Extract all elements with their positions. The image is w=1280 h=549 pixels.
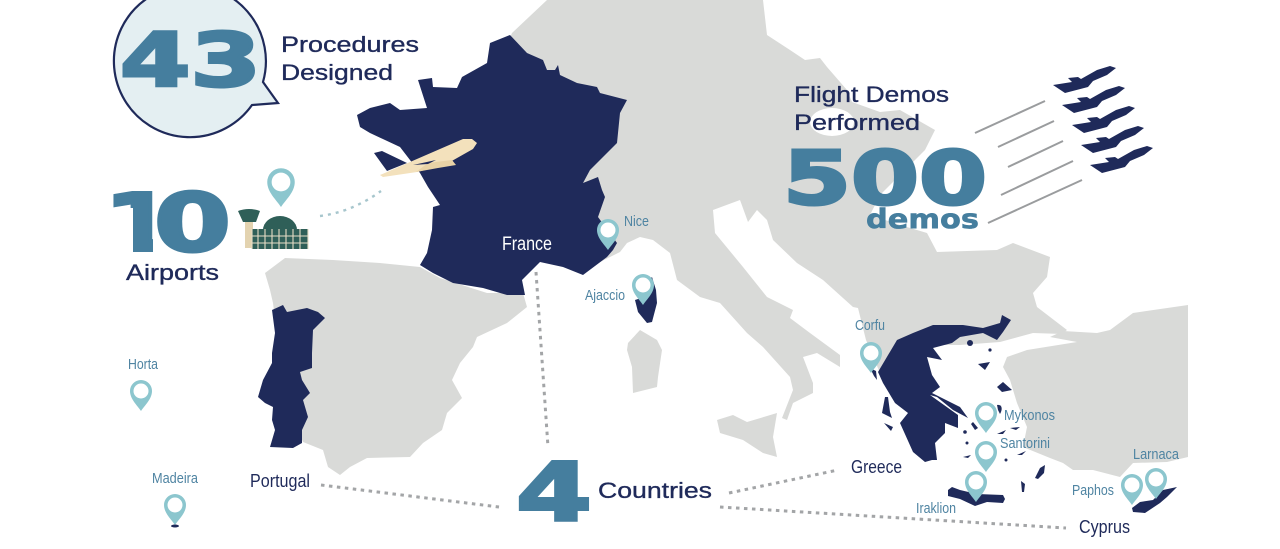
pin: Santorini <box>975 441 997 472</box>
France <box>357 35 627 295</box>
land: Sardinia <box>627 330 662 393</box>
Greece <box>870 315 1045 506</box>
label Madeira: Madeira <box>152 470 199 487</box>
fuselage <box>380 139 477 177</box>
label Horta: Horta <box>128 356 159 373</box>
label France: France <box>502 234 552 255</box>
jet 2 <box>1062 86 1125 113</box>
jet 4 <box>1081 126 1144 153</box>
label Corfu: Corfu <box>855 317 885 334</box>
dashed flight path <box>320 191 381 216</box>
pin: Paphos <box>1121 474 1143 505</box>
label procedures designed: Procedures <box>281 32 419 57</box>
stat: 500 flight demos <box>783 82 987 235</box>
city labels <box>128 213 1180 517</box>
stat: 4 countries <box>516 446 712 539</box>
label airports: Airports <box>126 260 219 285</box>
word demos: demos <box>866 204 979 235</box>
connector: Greece to 4 Countries <box>729 470 838 493</box>
callout: 43 procedures designed <box>114 0 419 137</box>
connector: France to 4 Countries <box>536 272 548 447</box>
pin: Madeira <box>164 494 186 525</box>
land: Spain <box>265 258 527 475</box>
map of southern Europe <box>258 0 1188 513</box>
label Cyprus: Cyprus <box>1079 517 1130 537</box>
jet 3 <box>1072 106 1135 133</box>
window stripe <box>413 160 436 165</box>
icon: formation of five jets with trails <box>975 66 1153 223</box>
white halo behind flight demos heading <box>810 108 854 136</box>
number 43: 43 <box>120 18 261 104</box>
label Portugal: Portugal <box>250 471 310 491</box>
label countries: Countries <box>598 478 712 503</box>
label Larnaca: Larnaca <box>1133 446 1180 463</box>
Portugal <box>258 305 325 448</box>
label Ajaccio: Ajaccio <box>585 287 625 304</box>
land: Turkey <box>1003 305 1188 477</box>
label Nice: Nice <box>624 213 649 230</box>
pin: Iraklion <box>965 471 987 502</box>
label Santorini: Santorini <box>1000 435 1050 452</box>
terminal building <box>252 229 308 249</box>
label procedures designed: Designed <box>281 60 393 85</box>
pin: airports icon <box>267 168 295 207</box>
Corsica <box>635 277 657 323</box>
jet 1 <box>1053 66 1116 93</box>
icon: airport terminal and tower <box>238 209 308 249</box>
land: mainland Europe and Italy <box>500 0 1067 420</box>
wing <box>416 160 456 172</box>
speech bubble <box>114 0 278 137</box>
pin: Mykonos <box>975 402 997 433</box>
airplane illustration <box>374 139 477 177</box>
Madeira island <box>171 524 179 528</box>
terminal dome <box>263 216 297 230</box>
country labels <box>250 234 1130 537</box>
number 10 <box>113 190 228 254</box>
label Paphos: Paphos <box>1072 482 1114 499</box>
tail fin <box>374 151 407 171</box>
jet 5 <box>1090 146 1153 173</box>
digit 0: 0 <box>154 177 231 270</box>
number 500: 500 <box>783 136 987 222</box>
connector: Portugal to 4 Countries <box>321 485 499 507</box>
pin: Ajaccio <box>632 274 654 305</box>
heading flight demos performed: Performed <box>794 110 920 135</box>
number 4: 4 <box>516 446 592 539</box>
pin: Nice <box>597 219 619 250</box>
control tower <box>245 222 253 248</box>
stat: 10 airports <box>113 190 228 285</box>
heading flight demos performed: Flight Demos <box>794 82 949 107</box>
pin: Horta <box>130 380 152 411</box>
land: Sicily <box>717 413 777 457</box>
pin: Larnaca <box>1145 468 1167 499</box>
connector: Cyprus to 4 Countries <box>720 507 1066 528</box>
jet trails <box>975 101 1082 223</box>
pin: Corfu <box>860 342 882 373</box>
label Iraklion: Iraklion <box>916 500 956 517</box>
label Mykonos: Mykonos <box>1004 407 1055 424</box>
Cyprus <box>1132 487 1177 513</box>
label Greece: Greece <box>851 457 902 477</box>
digit 1: 1 <box>104 177 174 270</box>
